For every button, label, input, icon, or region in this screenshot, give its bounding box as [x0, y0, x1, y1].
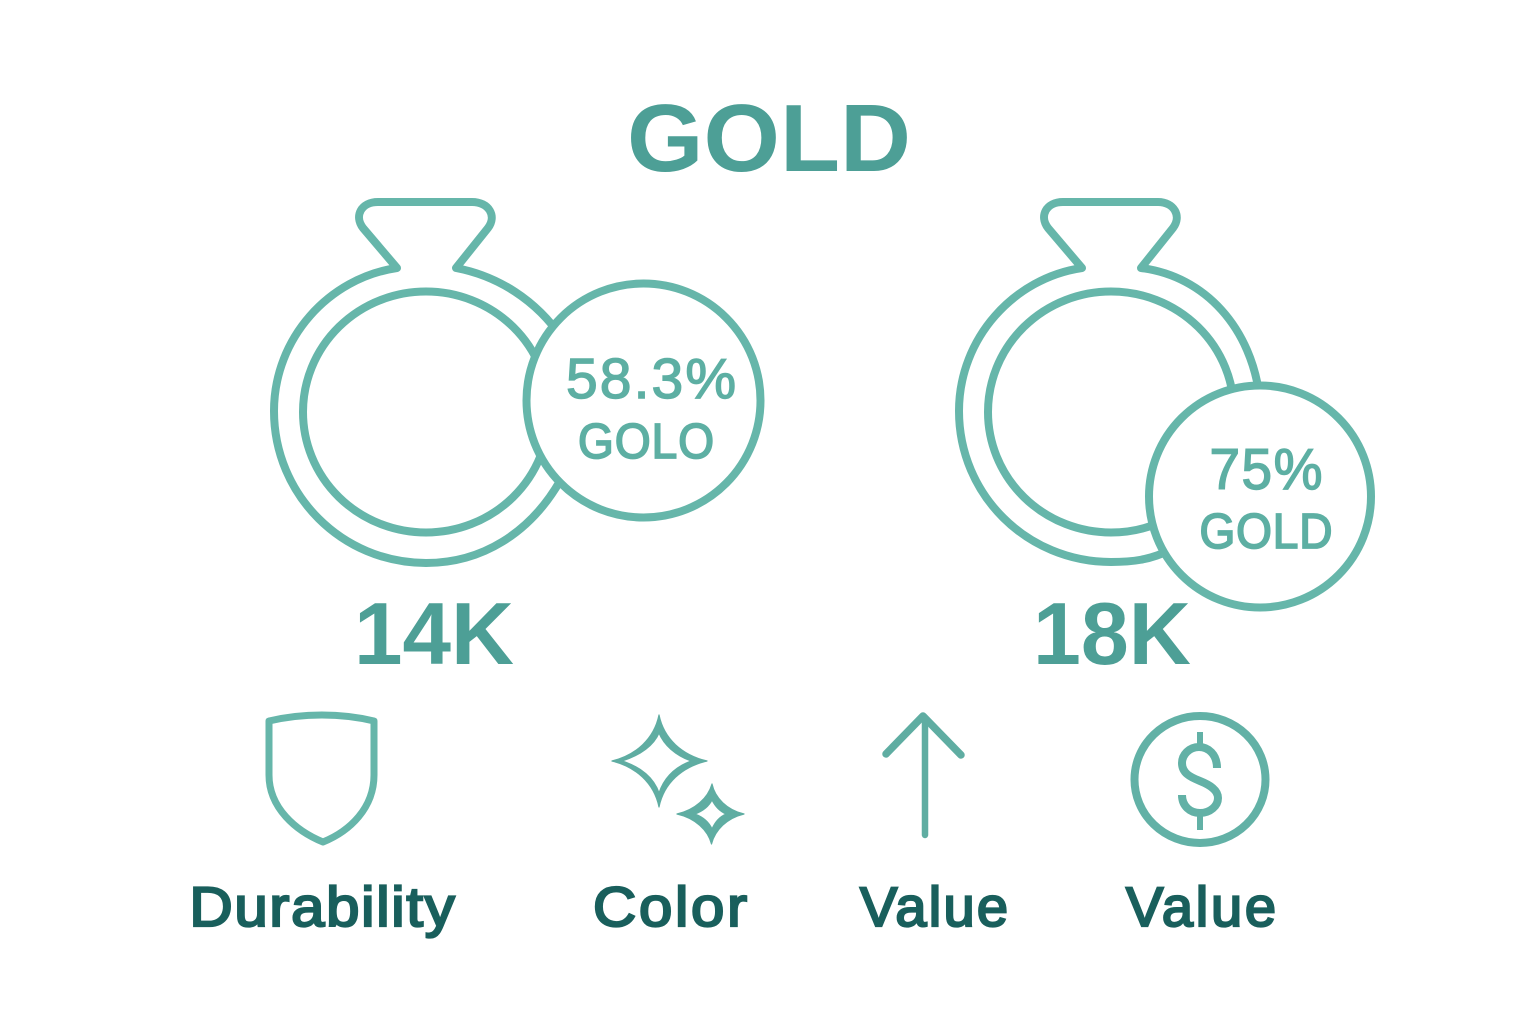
75% label: 75% — [1210, 437, 1322, 501]
ring band and gem — [274, 202, 562, 563]
14K ring icon with badge — [274, 202, 760, 563]
ring inner circle — [303, 292, 549, 532]
18K label: 18K — [1033, 584, 1191, 683]
58.3% label: 58.3% — [566, 347, 736, 411]
icon: sparkles — [612, 715, 744, 844]
ring inner circle — [988, 292, 1234, 532]
Color label: Color — [593, 877, 747, 939]
75% badge — [1149, 386, 1371, 608]
icon: dollar coin — [1134, 716, 1266, 843]
ring band and gem — [959, 202, 1260, 562]
Durability label: Durability — [189, 877, 455, 939]
GOLO label: GOLO — [578, 415, 714, 469]
icon: up arrow — [886, 716, 961, 835]
Value label 2: Value — [1126, 875, 1276, 938]
58.3% badge — [526, 284, 760, 518]
icon: shield — [269, 715, 374, 842]
Value label 1: Value — [860, 875, 1008, 938]
GOLD badge label: GOLD — [1200, 505, 1332, 559]
14K label: 14K — [354, 584, 514, 683]
title: GOLD — [627, 85, 911, 192]
18K ring icon with badge — [959, 202, 1371, 608]
